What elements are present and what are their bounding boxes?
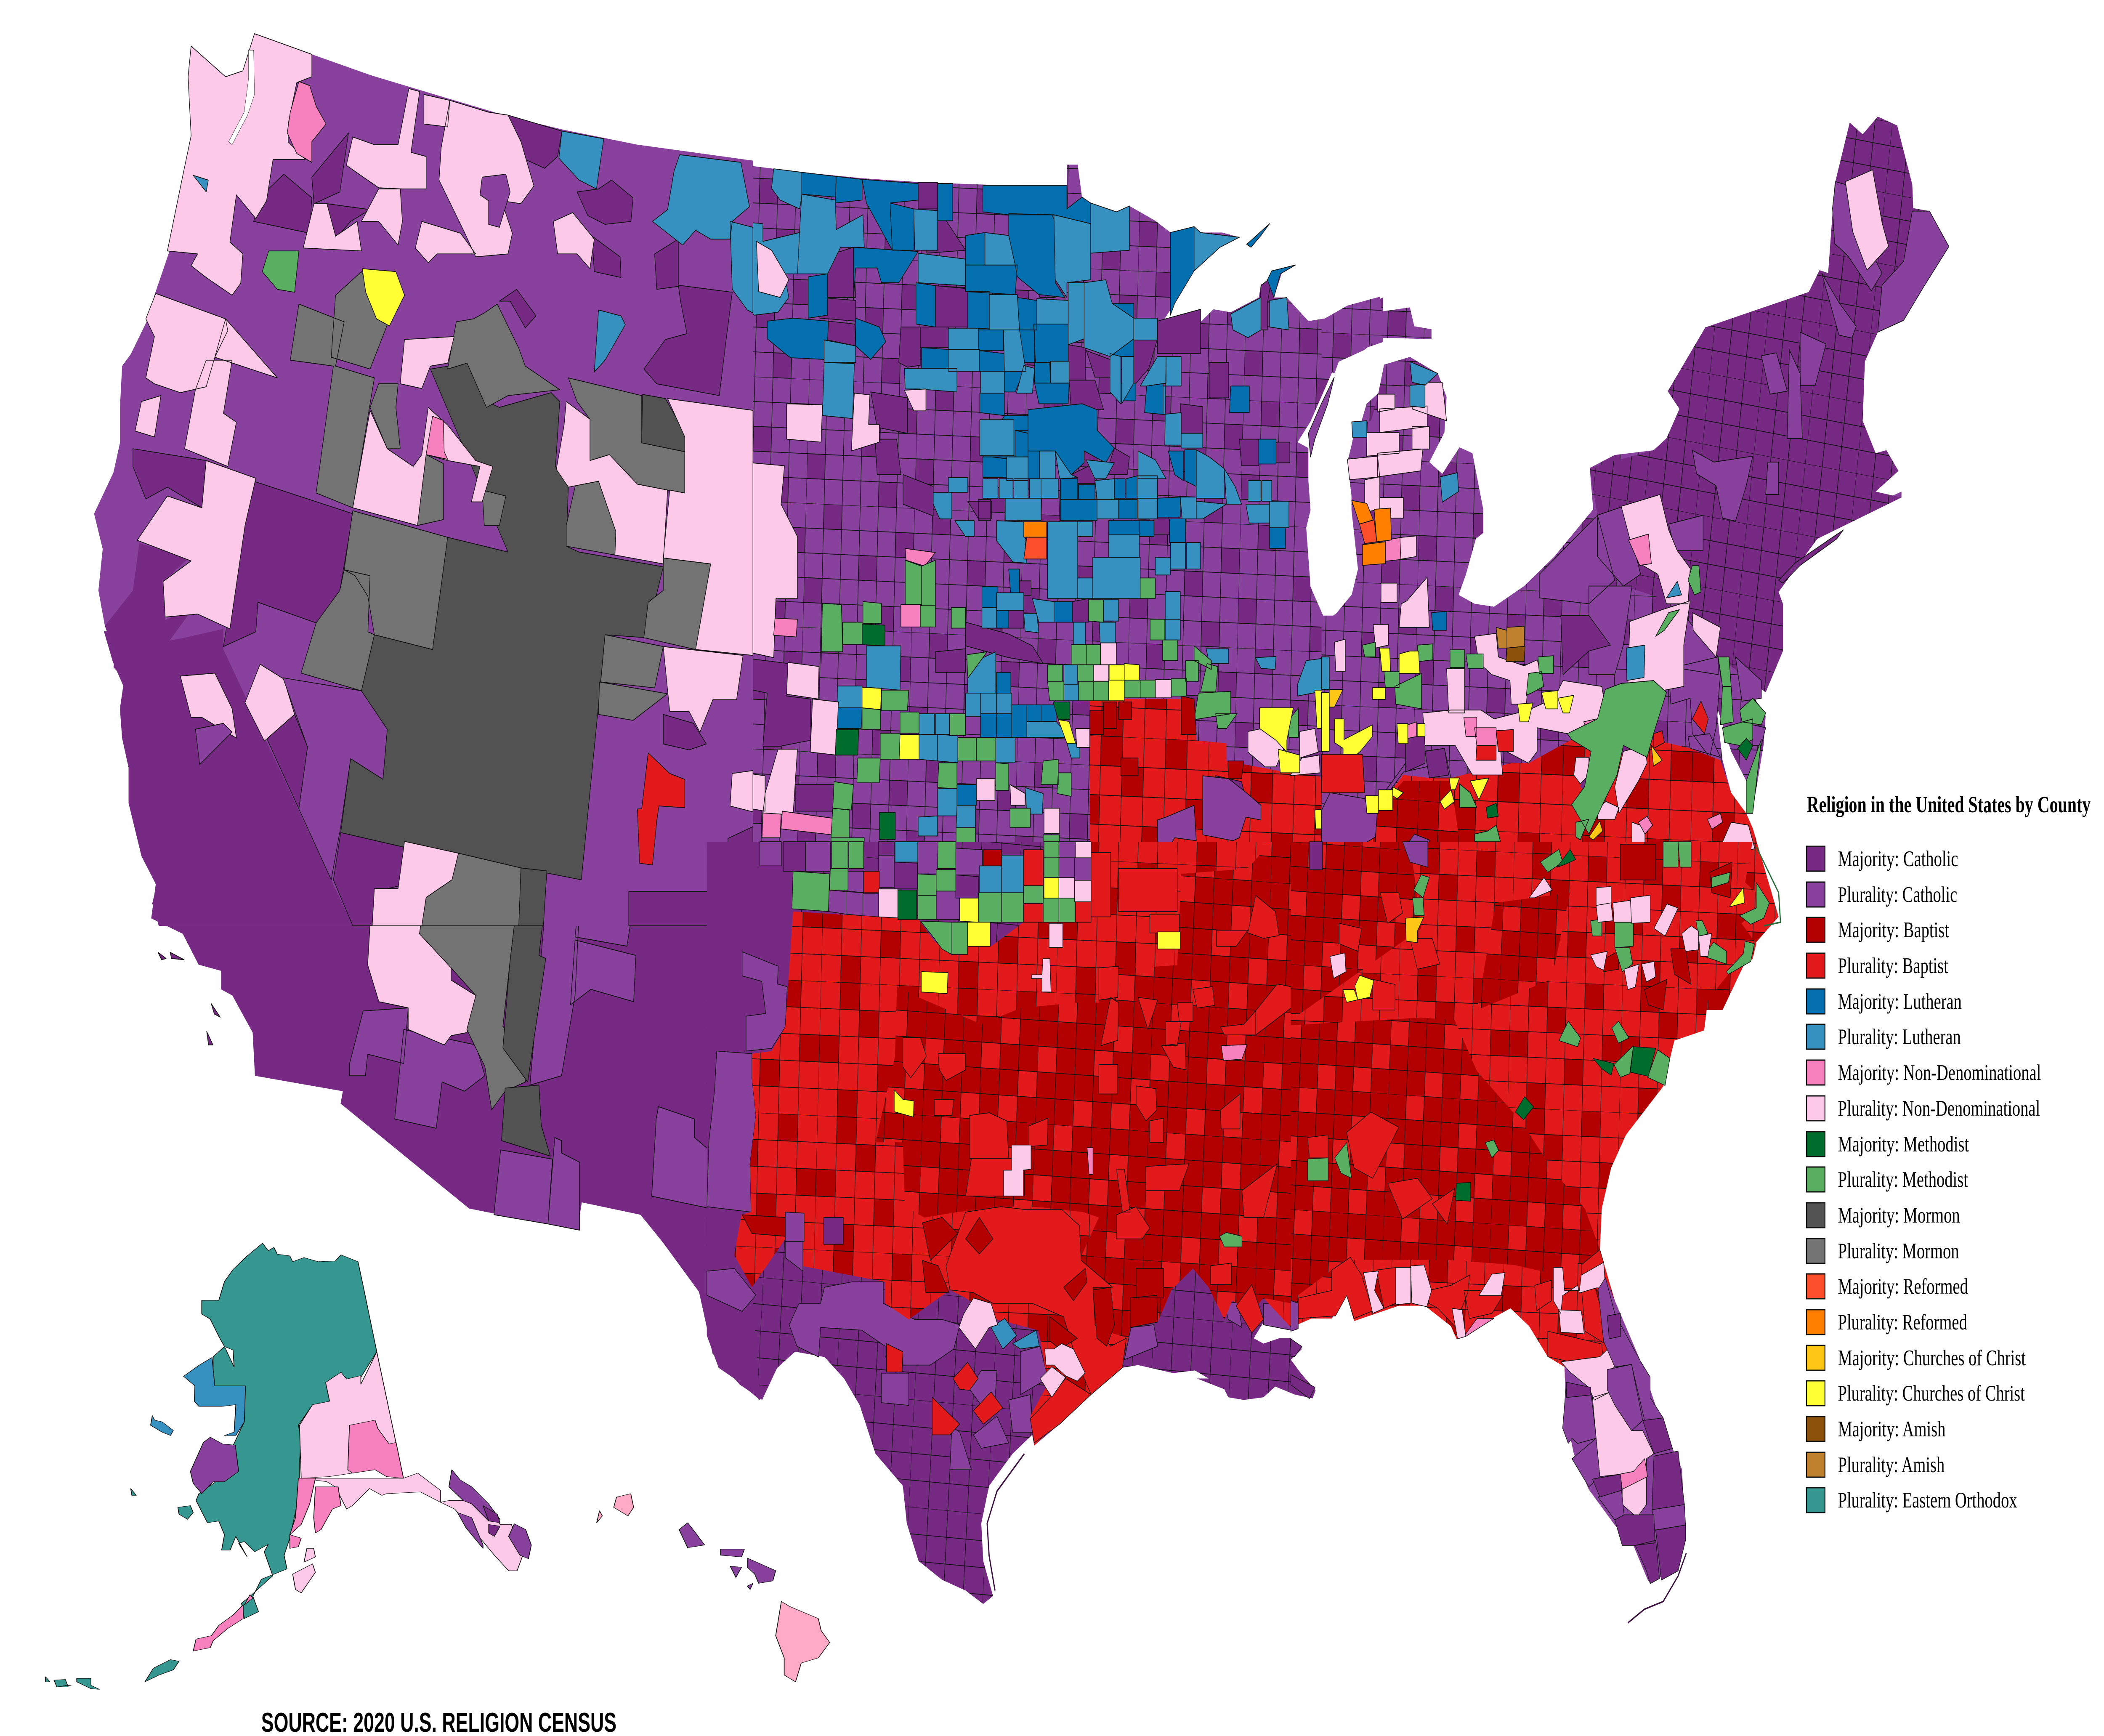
legend: Plurality Amish: Plurality: Amish	[1838, 1452, 1945, 1477]
legend: Plurality Baptist: Plurality: Baptist	[1838, 953, 1948, 978]
New Mexico and West Texas: large majority Catholic counties	[707, 842, 793, 1400]
plurality non-denominational: Wyoming, Dakotas and Utah	[353, 337, 753, 926]
map region: Southwest	[104, 631, 784, 1400]
legend: Majority Churches of Christ: Majority: Churches of Christ	[1838, 1345, 2026, 1370]
Lutheran: Michigan, Pennsylvania, Ohio	[1322, 362, 1682, 689]
plurality non-denominational: interior and gulf coast	[292, 1352, 523, 1593]
legend: Majority Mormon: Majority: Mormon	[1838, 1203, 1960, 1227]
plurality Catholic counties: Southwest	[194, 727, 712, 1230]
map region: Alaska	[45, 1243, 531, 1689]
majority Catholic boroughs: Southeast Alaska	[483, 1506, 500, 1537]
majority Methodist: Plains	[835, 624, 1070, 840]
majority non-denominational: Louisiana and Texas	[1087, 1045, 1247, 1175]
plurality Catholic: Texas border counties	[785, 1212, 804, 1271]
Reformed counties: Iowa	[1024, 522, 1047, 537]
Florida Keys	[1628, 1553, 1686, 1623]
legend: Majority Non-Denominational: Majority: Non-Denominational	[1838, 1060, 2041, 1085]
plurality Methodist: Carolinas, Georgia, Alabama	[1307, 842, 1769, 1181]
Channel Islands	[158, 952, 220, 1045]
map region: Great Lakes and Northeast	[1322, 117, 1949, 1010]
majority non-denominational: Plains	[762, 548, 935, 838]
majority non-denominational: Utah	[426, 416, 448, 460]
legend: Plurality Churches of Christ: Plurality: Churches of Christ	[1838, 1381, 2025, 1405]
legend title: Religion in the United States by County	[1807, 792, 2091, 818]
majority Churches of Christ: Tennessee	[1405, 917, 1424, 943]
majority Lutheran: Ohio	[1432, 611, 1447, 630]
plurality Baptist patches: Alabama, Georgia, Florida panhandle	[1298, 893, 1605, 1362]
plurality non-denominational: Maine, Michigan, Ohio, Pennsylvania	[1334, 170, 1889, 855]
plurality Baptist: Colorado	[638, 753, 685, 865]
majority Mormon: Wyoming east and New Mexico strip	[519, 394, 687, 926]
plurality Lutheran: Montana	[193, 131, 753, 372]
majority Churches of Christ	[1328, 689, 1344, 708]
plurality Lutheran: Nome and St Lawrence Island	[151, 1358, 245, 1436]
map region: Northwest and Mountain West	[94, 34, 753, 926]
majority Methodist: Delmarva and West Virginia	[1486, 739, 1753, 818]
Padre Island	[987, 1454, 1024, 1590]
legend: Plurality Methodist: Plurality: Methodist	[1838, 1167, 1968, 1191]
majority Catholic: Ohio River	[1405, 616, 1610, 778]
plurality Methodist: Kansas-Oklahoma and Mississippi	[792, 842, 1322, 1247]
Kentucky and Ohio river Catholic counties	[1322, 748, 1451, 867]
land: Carolinas, Georgia and Florida	[1291, 842, 1767, 1581]
Big Island	[776, 1601, 830, 1682]
majority Baptist: northeast North Carolina and Gulf	[1604, 844, 1732, 1010]
majority Baptist: Kentucky border	[1090, 696, 1244, 779]
legend: Majority Methodist: Majority: Methodist	[1838, 1132, 1969, 1156]
plurality Baptist: Virginia and Kentucky	[1322, 739, 1779, 1010]
legend: Majority Lutheran: Majority: Lutheran	[1838, 989, 1962, 1013]
land: Upper Peninsula	[1322, 297, 1432, 373]
majority Catholic counties: West	[133, 115, 753, 926]
legend: Plurality Non-Denominational: Plurality: Non-Denominational	[1838, 1096, 2040, 1120]
legend: Plurality Eastern Orthodox: Plurality: Eastern Orthodox	[1838, 1488, 2017, 1512]
majority Catholic: Florida and Gulf	[1291, 842, 1686, 1584]
Eastern Orthodox boroughs	[45, 1243, 377, 1689]
plurality Methodist: Plains and Ohio valley	[821, 560, 1377, 869]
legend	[1806, 792, 2091, 1513]
Florida peninsula base	[1565, 1278, 1686, 1581]
majority non-denominational: Pennsylvania, Ohio, Virginia	[1385, 534, 1722, 834]
majority non-denominational: Florida	[1466, 1319, 1647, 1489]
map region: Northern Plains and Upper Midwest	[707, 159, 1383, 869]
majority Reformed: west Michigan	[1360, 520, 1377, 544]
map region: Southeast	[1291, 842, 1780, 1623]
plurality Lutheran counties: Upper Midwest	[707, 159, 1328, 836]
plurality Catholic: Florida and Alabama	[1291, 842, 1686, 1530]
land: California, Arizona, New Mexico	[104, 631, 784, 1400]
Catholic counties: Kentucky border	[1158, 776, 1367, 856]
plurality Baptist patches	[863, 850, 1322, 1443]
Outer Banks	[1756, 847, 1780, 926]
plurality non-denominational: Carolinas and Florida	[1330, 877, 1712, 1518]
land: Dakotas to Wisconsin	[707, 159, 1383, 853]
Churches of Christ: Oklahoma and Texas	[894, 877, 1180, 1117]
plurality Amish: Ohio	[1496, 626, 1524, 648]
plurality Baptist: Maryland and Ohio	[1322, 701, 1708, 793]
Lutheran: Kansas and central Texas	[895, 842, 1039, 1349]
majority Lutheran counties: Upper Midwest	[767, 172, 1296, 805]
plurality non-denominational: New Mexico west	[368, 841, 476, 1045]
plurality Baptist: Missouri and Kentucky border	[1090, 699, 1383, 859]
Long Island	[1779, 530, 1843, 583]
plurality Methodist: Appalachia and Delmarva	[1363, 565, 1766, 899]
majority non-denominational: Chelan and Idaho	[287, 82, 326, 162]
legend: Plurality Reformed: Plurality: Reformed	[1838, 1310, 1967, 1334]
plurality Catholic: Texas and New Mexico	[707, 842, 1299, 1470]
non-denominational counties: Plains	[707, 242, 1383, 834]
majority Mormon: Utah, Colorado and Wyoming	[341, 363, 663, 880]
Reformed counties: west Michigan	[1352, 500, 1392, 565]
Puget Sound	[228, 50, 255, 145]
Door Peninsula	[1308, 377, 1334, 457]
Churches of Christ: Ohio and West Virginia	[1322, 648, 1574, 814]
Kauai and Niihau	[597, 1494, 634, 1523]
plurality Mormon: Idaho, Wyoming and Nevada border	[290, 271, 711, 926]
legend: Plurality Catholic: Plurality: Catholic	[1838, 882, 1957, 907]
majority Mormon counties: New Mexico	[502, 869, 550, 1156]
majority Methodist: Georgia and Carolinas	[1456, 849, 1656, 1201]
Churches of Christ: Tennessee and North Carolina	[1343, 888, 1744, 1002]
legend: Plurality Mormon: Plurality: Mormon	[1838, 1239, 1959, 1263]
majority Methodist: Kansas	[898, 890, 917, 920]
majority Baptist mix: Tennessee, Alabama, Georgia	[1291, 842, 1600, 1301]
plurality Churches of Christ: Idaho	[362, 269, 404, 326]
plurality Catholic: Bethel	[190, 1437, 239, 1494]
majority Churches of Christ: Virginia and Kentucky	[1329, 689, 1662, 840]
Catholic boroughs: Southeast Alaska	[449, 1470, 531, 1559]
map region: Hawaii	[597, 1494, 830, 1682]
land: Pacific Northwest to Northern Plains	[94, 34, 753, 926]
majority Baptist mix: central Texas to Mississippi	[875, 842, 1322, 1338]
plurality non-denominational: West	[135, 34, 594, 741]
Churches of Christ counties	[862, 664, 1383, 829]
majority Catholic: New York and New England	[1590, 117, 1949, 692]
majority Amish: Ohio	[1506, 646, 1525, 662]
majority Reformed: Iowa	[1024, 537, 1047, 559]
plurality Catholic: Lake County and central California	[195, 174, 510, 880]
majority Catholic: New Mexico-Texas border	[783, 842, 978, 1244]
Lake Michigan	[1298, 342, 1384, 616]
legend: Plurality Lutheran: Plurality: Lutheran	[1838, 1024, 1961, 1049]
non-denominational: Oklahoma and Texas	[879, 842, 1091, 1397]
plurality Catholic: New England and Maine	[1539, 181, 1949, 757]
majority Catholic: California	[105, 543, 353, 926]
land: Texas and Louisiana	[707, 842, 1322, 1604]
majority Baptist: eastern Kentucky	[1373, 781, 1459, 842]
legend: Majority Reformed: Majority: Reformed	[1838, 1274, 1968, 1298]
Mormon counties: New Mexico	[420, 853, 528, 1110]
plurality Methodist: eastern Oregon	[262, 251, 299, 292]
majority non-denominational: Alaska	[193, 1420, 404, 1651]
legend: Majority Baptist: Majority: Baptist	[1838, 917, 1949, 942]
Oahu, Molokai, Lanai, Maui, Kahoolawe	[679, 1523, 776, 1590]
land: Michigan to Virginia	[1322, 117, 1949, 1010]
majority Catholic counties: Plains	[707, 182, 1290, 817]
map region: Texas, Louisiana and South Central	[707, 842, 1322, 1604]
plurality Baptist base: Texas to Mississippi	[734, 842, 1322, 1446]
majority Baptist small patches	[742, 850, 1164, 1349]
legend: Majority Catholic: Majority: Catholic	[1838, 846, 1958, 871]
legend: Majority Amish: Majority: Amish	[1838, 1417, 1945, 1441]
